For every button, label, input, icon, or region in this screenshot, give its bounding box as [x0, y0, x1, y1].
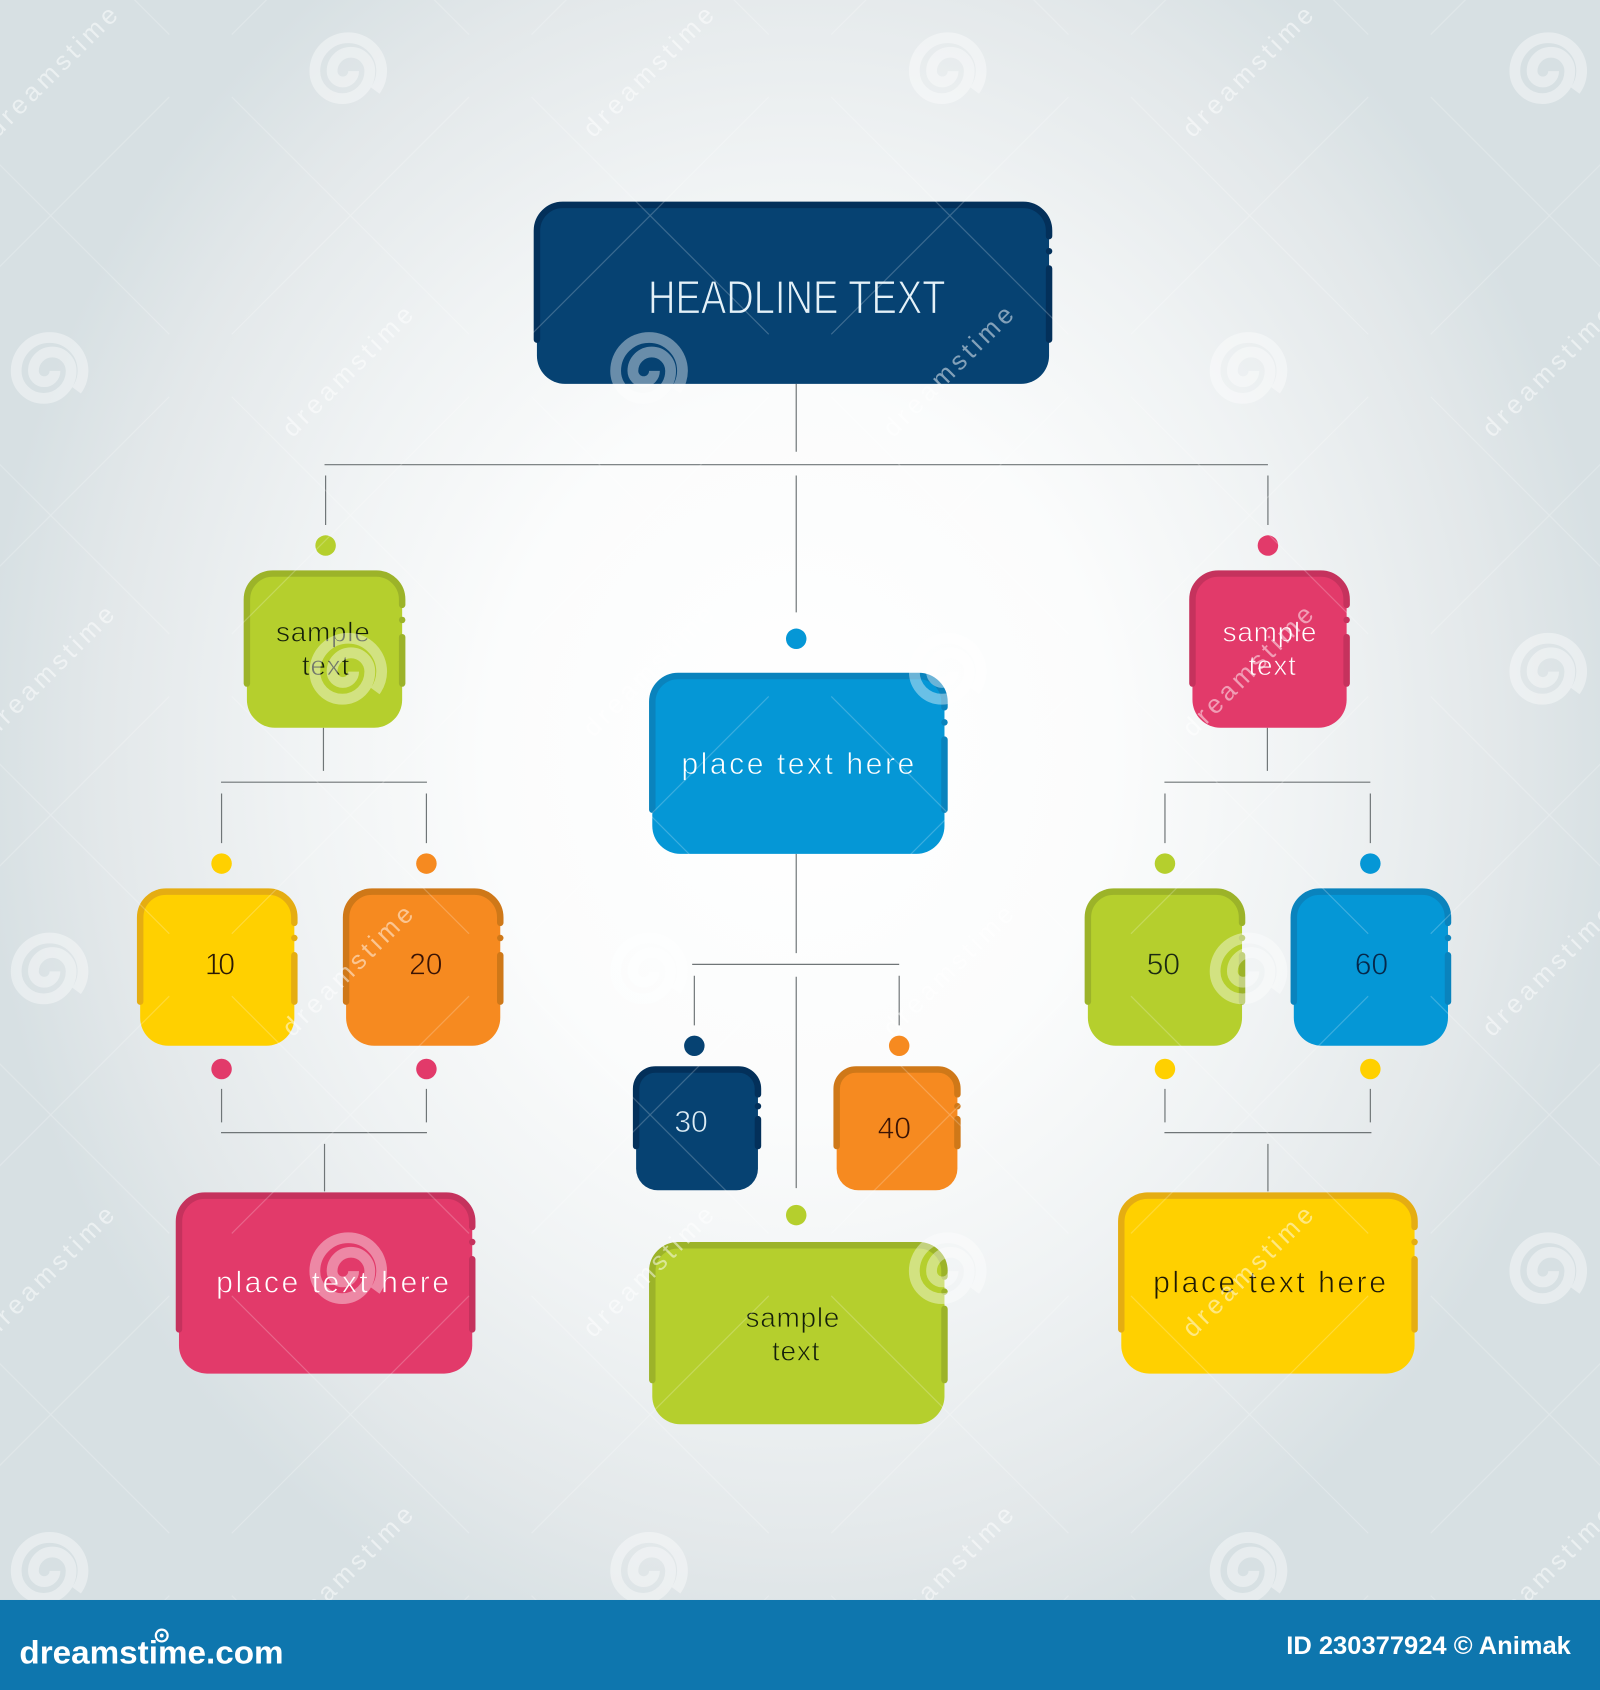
box: sample text lime center [652, 1244, 948, 1424]
box: sample text lime: sample [276, 616, 370, 647]
watermark text: dreamstime [1177, 1, 1319, 143]
box: 40 orange [837, 1068, 961, 1190]
watermark text: dreamstime [277, 900, 419, 1042]
footer logo text: dreamstime.com [19, 1635, 284, 1671]
watermark text: dreamstime [878, 301, 1019, 443]
box: place text here yellow: place text here [1153, 1267, 1386, 1300]
box: sample text pink: sample [1223, 616, 1316, 647]
box: sample text lime center: text [772, 1336, 820, 1367]
watermark text: dreamstime [878, 1501, 1019, 1643]
footer credit text: ID 230377924 © Animak [1286, 1633, 1571, 1660]
box: sample text pink [1192, 572, 1350, 728]
watermark text: dreamstime [578, 1, 720, 143]
headline text: HEADLINE TEXT [648, 272, 946, 325]
box: 30 navy: 30 [674, 1106, 708, 1139]
connector dots [211, 535, 1381, 1225]
box: 50 lime: 50 [1147, 949, 1180, 982]
headline box [537, 204, 1052, 384]
box: place text here pink [179, 1195, 475, 1374]
watermark text: dreamstime [277, 301, 419, 443]
box: place text here blue [652, 675, 948, 854]
box: 20 orange: 20 [409, 949, 443, 982]
box: place text here blue: place text here [681, 748, 914, 781]
box: place text here pink: place text here [216, 1267, 449, 1300]
watermark text: dreamstime [578, 601, 720, 742]
box: sample text pink: text [1249, 650, 1296, 681]
box: sample text lime [247, 572, 405, 728]
watermark text: dreamstime [578, 1201, 720, 1343]
box: place text here yellow [1121, 1195, 1418, 1374]
box: 10 yellow [140, 891, 298, 1046]
box: 10 yellow: 10 [205, 949, 235, 982]
watermark text: dreamstime [277, 1501, 419, 1643]
box: 60 blue [1294, 891, 1451, 1046]
box: 40 orange: 40 [878, 1113, 911, 1146]
box: 30 navy [636, 1068, 761, 1190]
watermark text: dreamstime [1177, 601, 1319, 742]
connector lines [221, 384, 1371, 1191]
box: 60 blue: 60 [1355, 949, 1388, 982]
box: sample text lime center: sample [746, 1302, 839, 1333]
watermark text: dreamstime [878, 900, 1019, 1042]
box: 20 orange [346, 891, 504, 1046]
box: 50 lime [1088, 891, 1245, 1046]
footer bar [0, 1600, 1600, 1690]
box: sample text lime: text [302, 650, 350, 681]
watermark text: dreamstime [1177, 1201, 1319, 1343]
